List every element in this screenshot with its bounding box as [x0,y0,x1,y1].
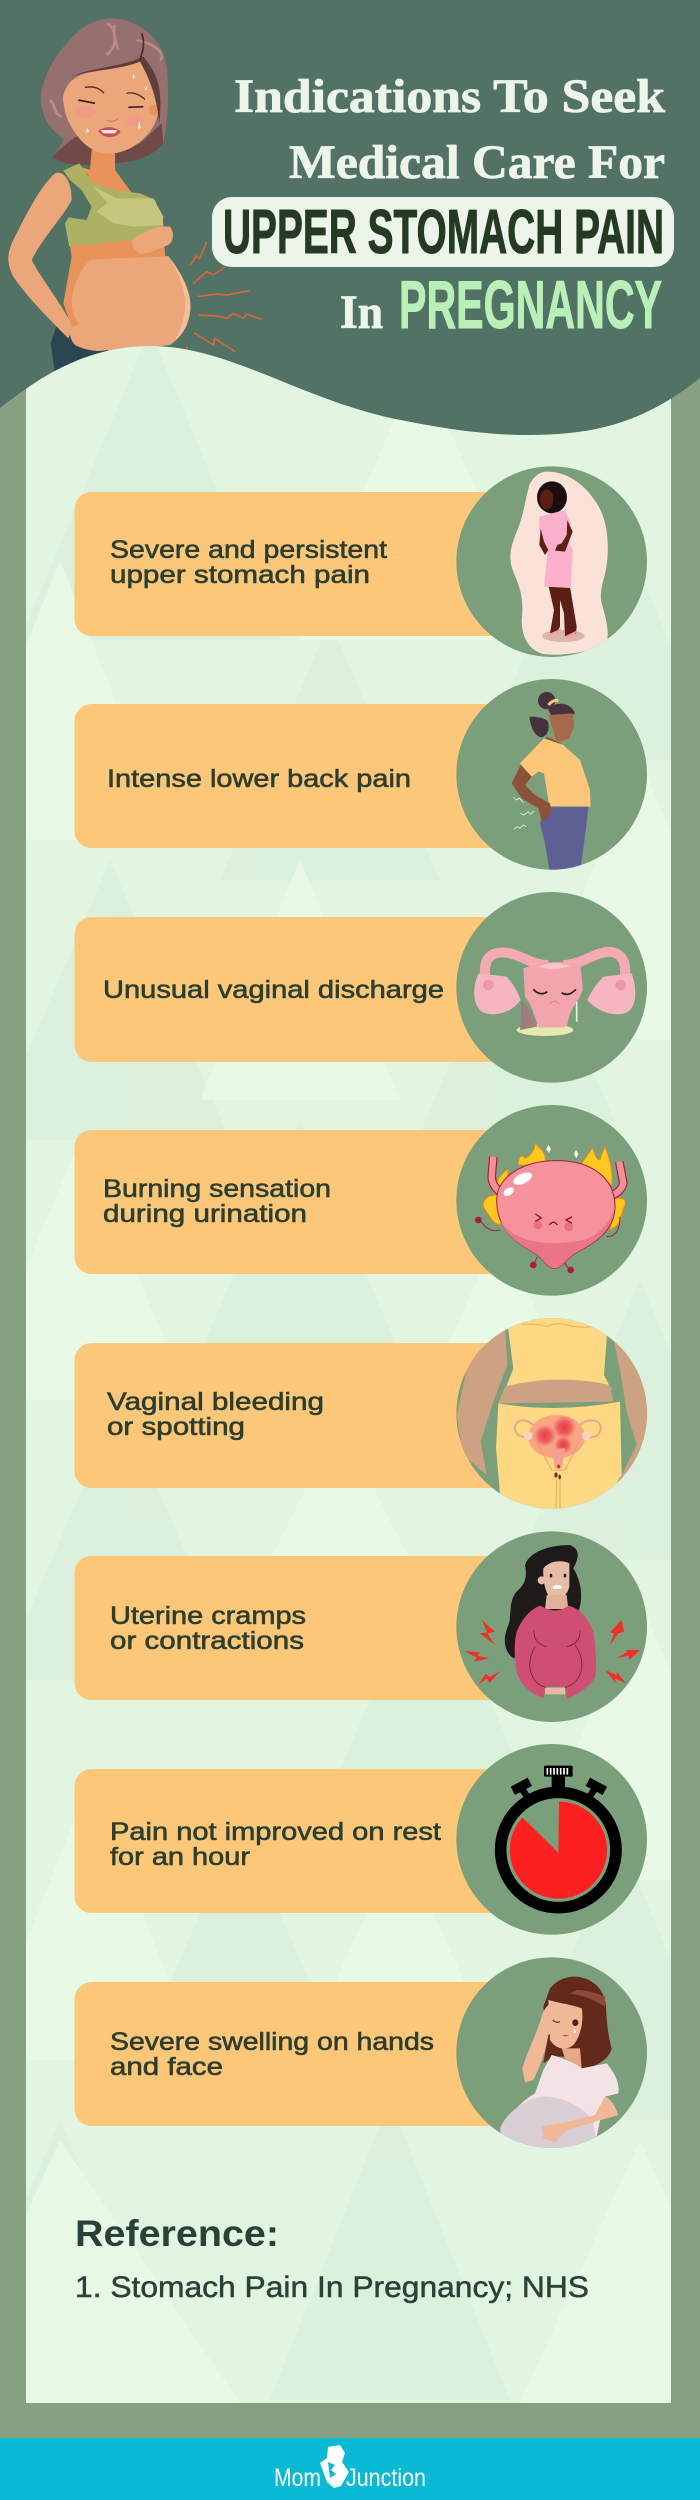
icons: circles 1 and 2 [456,466,647,873]
card 4: burning urination: Burning sensation [103,1175,331,1203]
card 7: pain not improved on rest [74,1769,514,1913]
card 3: vaginal discharge: Unusual vaginal discharge [103,976,444,1004]
reference heading: Reference: [75,2213,279,2254]
card 4: burning urination: during urination [103,1200,307,1228]
card 6: cramps: or contractions [110,1627,304,1655]
title: Indications To Seek [234,70,665,123]
icons: circles 7 and 8 [456,1744,647,2153]
icon: woman with cramps [456,1531,647,1722]
icon: crying pregnant woman with swollen face [456,1957,647,2153]
card 2: lower back pain: Intense lower back pain [107,765,411,793]
card 1: severe stomach pain: upper stomach pain [110,561,370,589]
logo: MomJunction: Junction [346,2464,426,2492]
card 8: swelling: and face [110,2053,223,2081]
icon: stopwatch [456,1744,647,1935]
card 5: bleeding: or spotting [107,1413,245,1441]
footer bar [0,2438,700,2500]
title: Medical Care For [289,136,665,189]
card 8: swelling: Severe swelling on hands [110,2028,434,2056]
header background [0,0,700,450]
icon: abdomen with bleeding uterus [456,1315,653,1515]
logo: MomJunction [274,2445,426,2492]
card 4: burning urination [74,1130,514,1274]
icon: burning bladder [456,1105,647,1296]
card 6: cramps [74,1556,514,1700]
icon: woman with lower back pain [456,679,647,873]
reference item: 1. Stomach Pain In Pregnancy; NHS [75,2271,589,2304]
title [212,70,674,343]
icon: sad uterus with discharge [456,892,647,1083]
logo: MomJunction: Mom [274,2464,321,2492]
card 5: bleeding: Vaginal bleeding [107,1388,324,1416]
icon: woman holding stomach [456,466,647,657]
card 8: swelling [74,1982,514,2126]
card 6: cramps: Uterine cramps [110,1602,306,1630]
illustration: pregnant woman in pain [8,18,262,373]
icons: circles 5 and 6 [456,1315,653,1722]
card 7: pain not improved on rest: Pain not improved on rest [110,1818,441,1846]
title: In [340,286,383,339]
icons: circles 3 and 4 [456,892,647,1296]
card 3: vaginal discharge [74,917,514,1062]
card 7: pain not improved on rest: for an hour [110,1843,250,1871]
card 1: severe stomach pain: Severe and persistent [110,536,387,564]
card 5: bleeding [74,1343,514,1488]
card 2: lower back pain [74,704,514,848]
card 1: severe stomach pain [74,492,514,636]
